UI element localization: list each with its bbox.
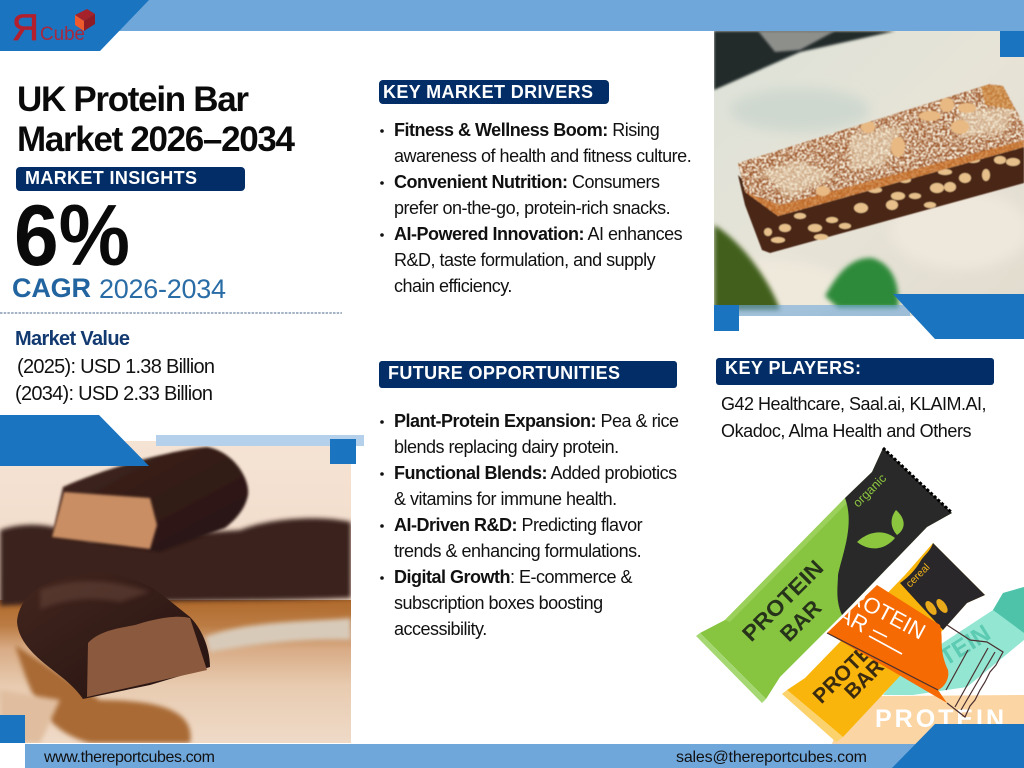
logo wordmark: Cube: [40, 24, 85, 45]
list: future opportunities: accessibility.: [394, 619, 487, 639]
top banner band: [90, 0, 1024, 31]
list: key market drivers: AI-Powered Innovation: AI enhances: [394, 224, 683, 244]
market value: Market Value: [15, 328, 130, 350]
heading: key players: [716, 358, 994, 385]
green organic bar: organic: [850, 471, 889, 510]
green organic bar: BAR: [775, 595, 826, 646]
list: future opportunities: trends & enhancing formulations.: [394, 541, 641, 561]
orange open wrapper: [821, 576, 1003, 717]
photo: nut and seed bar on paper: [714, 31, 1024, 316]
orange open wrapper: BAR: [821, 594, 872, 638]
logo panel: [0, 0, 149, 51]
teal bar: [883, 587, 1024, 695]
teal bar: TEIN: [935, 620, 995, 672]
list: future opportunities: subscription boxes boosting: [394, 593, 603, 613]
list: key market drivers: Fitness & Wellness Boom: Rising: [394, 120, 659, 140]
green organic bar: [696, 448, 952, 703]
list: future opportunities: AI-Driven R&D: Predicting flavor: [394, 515, 643, 535]
corner square: photo bottom left: [0, 715, 25, 743]
footer corner panel: [892, 724, 1024, 768]
photo: chocolate protein bars: [0, 441, 351, 743]
logo mark: reversed R: Я: [12, 7, 39, 48]
corner square: photo bottom left: [714, 305, 739, 331]
title: [17, 80, 296, 159]
stat: 6% CAGR: 6%: [14, 188, 130, 284]
title: Market 2026–2034: [17, 120, 296, 159]
illustration: protein bar wrappers: [696, 448, 1024, 744]
footer website: www.thereportcubes.com: [43, 749, 215, 766]
list: future opportunities: [380, 411, 679, 639]
heading: key players: KEY PLAYERS:: [725, 358, 861, 378]
corner square: photo top right: [1000, 31, 1024, 57]
text: key players list: G42 Healthcare, Saal.ai, KLAIM.AI,: [721, 394, 986, 414]
market value: [15, 328, 215, 405]
heading: key market drivers: KEY MARKET DRIVERS: [383, 82, 593, 102]
orange open wrapper: PROTEIN: [832, 576, 930, 644]
bar side: [730, 80, 1024, 253]
list: future opportunities: blends replacing dairy protein.: [394, 437, 619, 457]
bar top: [738, 84, 1024, 216]
list: key market drivers: prefer on-the-go, protein-rich snacks.: [394, 198, 670, 218]
icon: wheat: [925, 599, 948, 615]
text: key players list: [721, 394, 986, 441]
stat: 6% CAGR: 2026-2034: [99, 274, 226, 304]
green organic bar: PROTEIN: [737, 555, 828, 646]
footer email: sales@thereportcubes.com: [676, 749, 867, 766]
yellow cereal bar: PROTE: [809, 641, 876, 708]
yellow cereal bar: [782, 543, 985, 742]
corner panel: photo bottom right: [893, 294, 1024, 339]
list: future opportunities: Plant-Protein Expansion: Pea & rice: [394, 411, 679, 431]
footer band: [25, 744, 1024, 768]
stat: 6% CAGR: [12, 188, 226, 304]
rear bar: [0, 518, 351, 606]
peach bar: [832, 695, 1024, 744]
list: key market drivers: chain efficiency.: [394, 276, 512, 296]
leaf: [714, 225, 780, 310]
yellow cereal bar: BAR: [840, 655, 889, 704]
peach bar: PROTEIN: [875, 705, 1004, 733]
stat: 6% CAGR: CAGR: [12, 273, 91, 303]
heading: market insights: MARKET INSIGHTS: [25, 168, 197, 188]
light strip: photo top: [156, 435, 364, 446]
heading: market insights: [16, 167, 245, 191]
corner square: photo top right: [330, 439, 356, 464]
heading: future opportunities: [379, 361, 677, 388]
list: key market drivers: awareness of health and fitness culture.: [394, 146, 691, 166]
market value: (2025): USD 1.38 Billion: [17, 356, 215, 378]
text: key players list: Okadoc, Alma Health and Others: [721, 421, 972, 441]
market value: (2034): USD 2.33 Billion: [15, 383, 213, 405]
list: key market drivers: [380, 120, 691, 296]
corner panel: photo top left: [0, 415, 149, 466]
icon: leaves: [857, 510, 904, 548]
yellow cereal bar: cereal: [904, 561, 932, 590]
heading: future opportunities: FUTURE OPPORTUNITIES: [388, 363, 620, 383]
front bar: [17, 596, 210, 699]
list: future opportunities: & vitamins for immune health.: [394, 489, 617, 509]
logo cube icon: [75, 9, 95, 31]
upper bar: [52, 447, 248, 552]
title: UK Protein Bar: [17, 80, 249, 119]
list: key market drivers: Convenient Nutrition: Consumers: [394, 172, 660, 192]
list: future opportunities: Functional Blends: Added probiotics: [394, 463, 677, 483]
list: key market drivers: R&D, taste formulation, and supply: [394, 250, 656, 270]
list: future opportunities: Digital Growth: E-commerce &: [394, 567, 633, 587]
